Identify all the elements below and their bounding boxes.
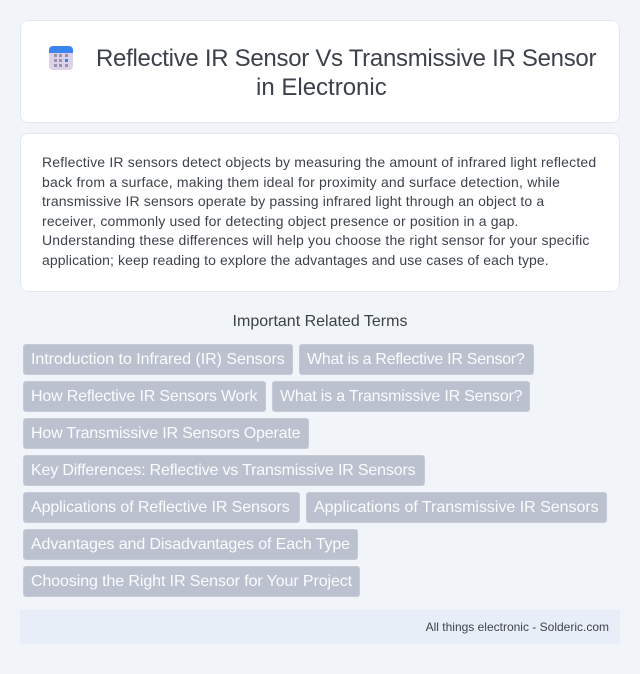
intro text: Understanding these differences will help you choose the right sensor for your specific bbox=[42, 232, 590, 248]
title line 1: Reflective IR Sensor Vs Transmissive IR Sensor bbox=[96, 45, 596, 72]
tag: What is a Reflective IR Sensor? bbox=[307, 351, 524, 368]
intro text: application; keep reading to explore the advantages and use cases of each type. bbox=[42, 252, 549, 268]
tag bbox=[23, 492, 300, 523]
tag bbox=[306, 492, 607, 523]
tag: How Reflective IR Sensors Work bbox=[31, 388, 257, 405]
intro panel bbox=[20, 133, 620, 292]
tag: Introduction to Infrared (IR) Sensors bbox=[31, 351, 285, 368]
tag: Applications of Reflective IR Sensors bbox=[31, 499, 290, 516]
title line 2: in Electronic bbox=[256, 74, 387, 101]
related terms heading: Important Related Terms bbox=[233, 313, 407, 330]
tag: Key Differences: Reflective vs Transmissive IR Sensors bbox=[31, 462, 415, 479]
footer text: All things electronic - Solderic.com bbox=[426, 620, 609, 634]
tag bbox=[23, 529, 358, 560]
tag bbox=[23, 566, 360, 597]
tag: Advantages and Disadvantages of Each Type bbox=[31, 536, 350, 553]
tag: How Transmissive IR Sensors Operate bbox=[31, 425, 300, 442]
intro text: receiver, commonly used for detecting object presence or position in a gap. bbox=[42, 213, 519, 229]
intro text: Reflective IR sensors detect objects by measuring the amount of infrared light reflected bbox=[42, 154, 596, 170]
icon: calendar bbox=[49, 46, 73, 70]
tag bbox=[299, 344, 534, 375]
tag: What is a Transmissive IR Sensor? bbox=[280, 388, 522, 405]
tag: Applications of Transmissive IR Sensors bbox=[314, 499, 599, 516]
header panel bbox=[20, 20, 620, 123]
tag bbox=[23, 344, 293, 375]
intro text: back from a surface, making them ideal for proximity and surface detection, while bbox=[42, 174, 560, 190]
tag bbox=[23, 418, 309, 449]
tag bbox=[23, 381, 266, 412]
footer bar bbox=[20, 610, 620, 644]
title bbox=[96, 45, 596, 101]
tag bbox=[272, 381, 530, 412]
tag: Choosing the Right IR Sensor for Your Project bbox=[31, 573, 352, 590]
related terms tags bbox=[23, 344, 607, 597]
intro text: transmissive IR sensors operate by passing infrared light through an object to a bbox=[42, 193, 544, 209]
intro text bbox=[42, 154, 596, 268]
tag bbox=[23, 455, 425, 486]
